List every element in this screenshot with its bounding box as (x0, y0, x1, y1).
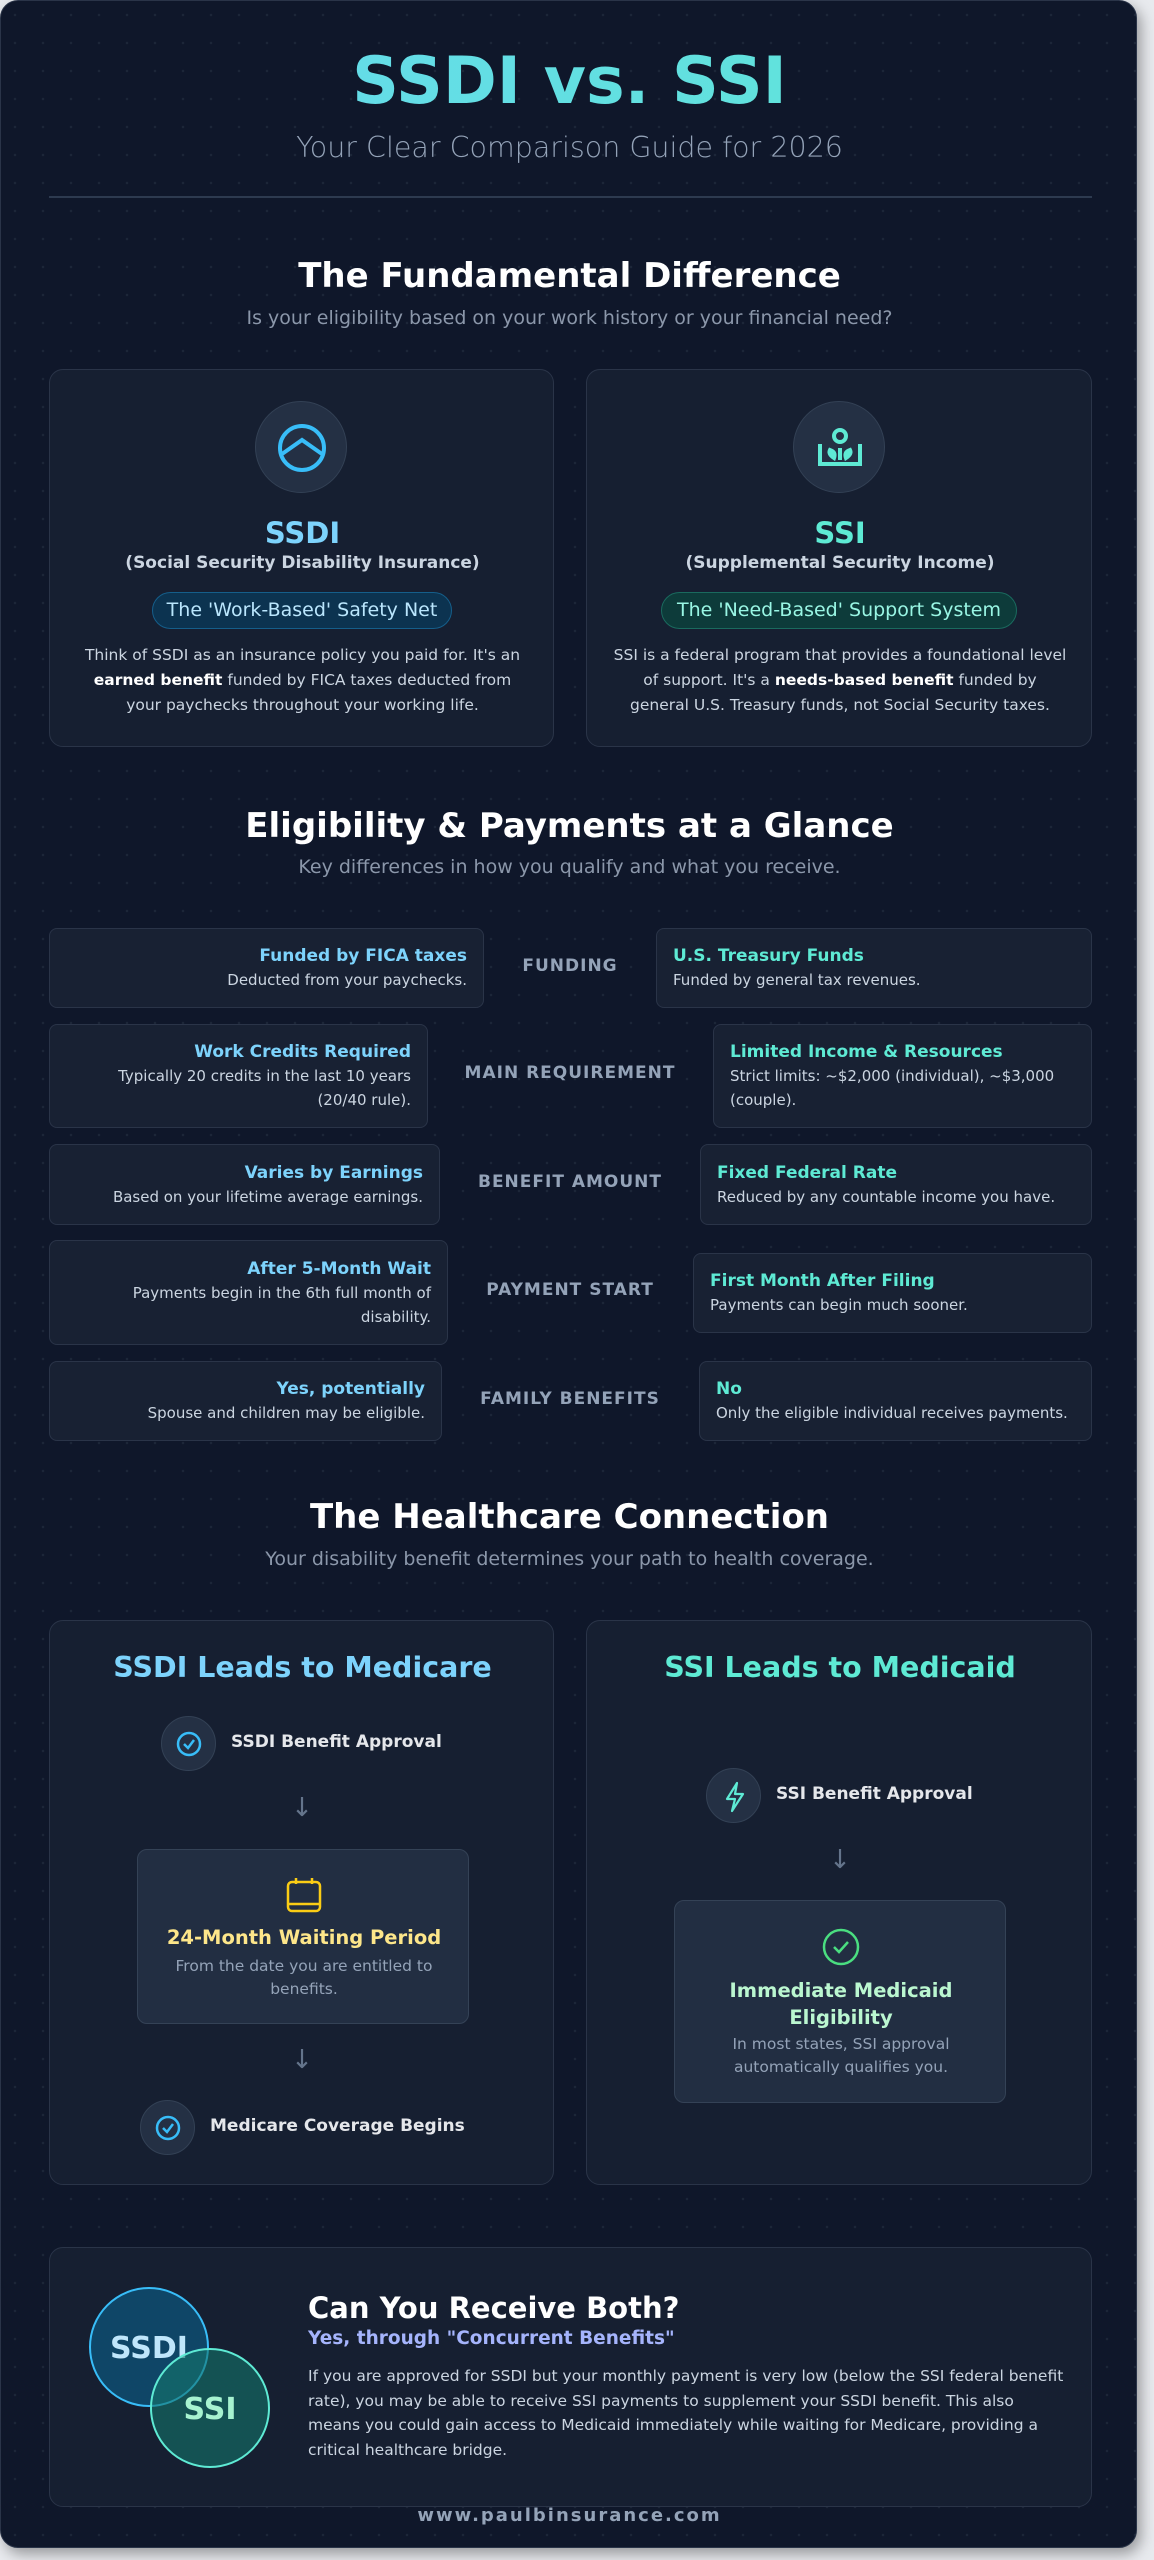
row: amount SSDI (49, 1144, 440, 1225)
heading: eligibility: Eligibility & Payments at a Glance (245, 806, 894, 846)
panel: SSDI (49, 369, 554, 747)
step: medicare begins: Medicare Coverage Begins (210, 2116, 465, 2136)
row: funding SSI (656, 928, 1092, 1008)
heading: Can You Receive Both? (308, 2291, 679, 2325)
step: approval: SSI Benefit Approval (776, 1784, 973, 1804)
row: requirement SSI: Limited Income & Resources (730, 1042, 1003, 1062)
panel heading: SSDI Leads to Medicare (113, 1651, 492, 1684)
paragraph (308, 2367, 1063, 2458)
venn diagram (89, 2287, 270, 2468)
step: approval (706, 1768, 973, 1823)
comparison table (49, 928, 1092, 1441)
row: family SSDI: Yes, potentially (276, 1379, 425, 1399)
row: funding SSI: Funded by general tax revenues. (673, 971, 921, 989)
panel: can you receive both (49, 2247, 1092, 2507)
immediate eligibility box: Immediate Medicaid Eligibility (730, 1979, 952, 2029)
row: requirement SSDI: Typically 20 credits in the last 10 years (20/40 rule). (118, 1067, 411, 1109)
row: amount SSDI: Varies by Earnings (245, 1162, 423, 1182)
subheading: Yes, through "Concurrent Benefits" (308, 2328, 675, 2349)
pill (152, 592, 452, 629)
row: requirement SSDI (49, 1024, 428, 1128)
footer: www.paulbinsurance.com (417, 2505, 722, 2526)
row: requirement SSI (713, 1024, 1092, 1128)
label: requirement: MAIN REQUIREMENT (465, 1063, 675, 1083)
row: requirement SSI: Strict limits: ~$2,000 (individual), ~$3,000 (couple). (730, 1067, 1054, 1109)
paragraph: If you are approved for SSDI but your monthly payment is very low (below the SSI federal benefit (308, 2367, 1063, 2385)
row: amount SSI: Fixed Federal Rate (717, 1162, 897, 1182)
waiting period box: From the date you are entitled to benefits. (176, 1957, 432, 1998)
icon: calendar (286, 1878, 322, 1912)
name: SSI (814, 516, 866, 550)
panel: SSI (586, 369, 1092, 747)
name: SSDI (265, 516, 340, 550)
subtitle: Your Clear Comparison Guide for 2026 (296, 131, 843, 164)
pill: The 'Need-Based' Support System (677, 599, 1001, 621)
row: start SSI (693, 1253, 1092, 1333)
row: funding SSDI: Funded by FICA taxes (259, 946, 467, 966)
pill (661, 592, 1017, 629)
immediate eligibility box (674, 1900, 1006, 2103)
subheading: Key differences in how you qualify and what you receive. (298, 856, 841, 878)
row: start SSDI (49, 1240, 448, 1345)
heading: fundamental difference: The Fundamental Difference (298, 256, 841, 296)
icon: check circle (822, 1928, 860, 1966)
subheading: Your disability benefit determines your path to health coverage. (265, 1548, 874, 1570)
full name: (Supplemental Security Income) (686, 553, 994, 573)
waiting period box: 24-Month Waiting Period (167, 1926, 441, 1949)
row: start SSI: First Month After Filing (710, 1271, 935, 1291)
row: requirement SSDI: Work Credits Required (194, 1042, 411, 1062)
icon: hands/person (793, 401, 885, 493)
step: medicare begins (140, 2100, 465, 2155)
subheading: Is your eligibility based on your work history or your financial need? (246, 307, 892, 329)
label: start: PAYMENT START (486, 1280, 654, 1300)
row: family SSDI: Spouse and children may be eligible. (148, 1404, 425, 1422)
icon: check (161, 1716, 216, 1771)
arrow: ↓ (829, 1845, 851, 1875)
row: amount SSDI: Based on your lifetime average earnings. (113, 1188, 423, 1206)
label: family: FAMILY BENEFITS (480, 1389, 660, 1409)
row: funding SSI: U.S. Treasury Funds (673, 946, 864, 966)
paragraph: rate), you may be able to receive SSI payments to supplement your SSDI benefit. This also (308, 2392, 1014, 2410)
title: SSDI vs. SSI (352, 44, 787, 119)
panel: SSI to Medicaid (586, 1620, 1092, 2185)
label: amount: BENEFIT AMOUNT (478, 1172, 662, 1192)
row: funding SSDI (49, 928, 484, 1008)
panel: SSDI to Medicare (49, 1620, 554, 2185)
description: Think of SSDI as an insurance policy you paid for. It's an earned benefit funded by FICA taxes deducted from your paychecks throughout your working life. (85, 646, 520, 714)
arrow: ↓ (291, 1793, 313, 1823)
row: start SSDI: After 5-Month Wait (247, 1258, 431, 1278)
row: start SSDI: Payments begin in the 6th full month of disability. (133, 1284, 431, 1326)
paragraph: means you could gain access to Medicaid immediately while waiting for Medicare, providing a (308, 2416, 1038, 2434)
row: amount SSI (700, 1144, 1092, 1225)
venn diagram: SSDI (110, 2331, 188, 2366)
label: funding: FUNDING (522, 956, 618, 976)
icon: umbrella/shield (255, 401, 347, 493)
arrow: ↓ (291, 2045, 313, 2075)
full name: (Social Security Disability Insurance) (125, 553, 480, 573)
heading: healthcare: The Healthcare Connection (310, 1497, 829, 1537)
row: start SSI: Payments can begin much sooner. (710, 1296, 968, 1314)
icon: lightning (706, 1768, 761, 1823)
row: family SSDI (49, 1361, 442, 1441)
icon: check (140, 2100, 195, 2155)
paragraph: critical healthcare bridge. (308, 2440, 507, 2458)
step: approval: SSDI Benefit Approval (231, 1732, 442, 1752)
waiting period box (137, 1849, 469, 2024)
step: approval (161, 1716, 442, 1771)
pill: The 'Work-Based' Safety Net (167, 599, 437, 621)
panel heading: SSI Leads to Medicaid (664, 1651, 1016, 1684)
description: SSI is a federal program that provides a foundational level of support. It's a needs-based benefit funded by general U.S. Treasury funds, not Social Security taxes. (614, 646, 1066, 714)
row: family SSI (699, 1361, 1092, 1441)
row: family SSI: No (716, 1379, 742, 1399)
title (1, 39, 1138, 125)
venn diagram: SSI (183, 2392, 237, 2427)
immediate eligibility box: In most states, SSI approval automatically qualifies you. (732, 2035, 950, 2076)
row: family SSI: Only the eligible individual receives payments. (716, 1404, 1068, 1422)
row: amount SSI: Reduced by any countable income you have. (717, 1188, 1055, 1206)
row: funding SSDI: Deducted from your paychecks. (227, 971, 467, 989)
